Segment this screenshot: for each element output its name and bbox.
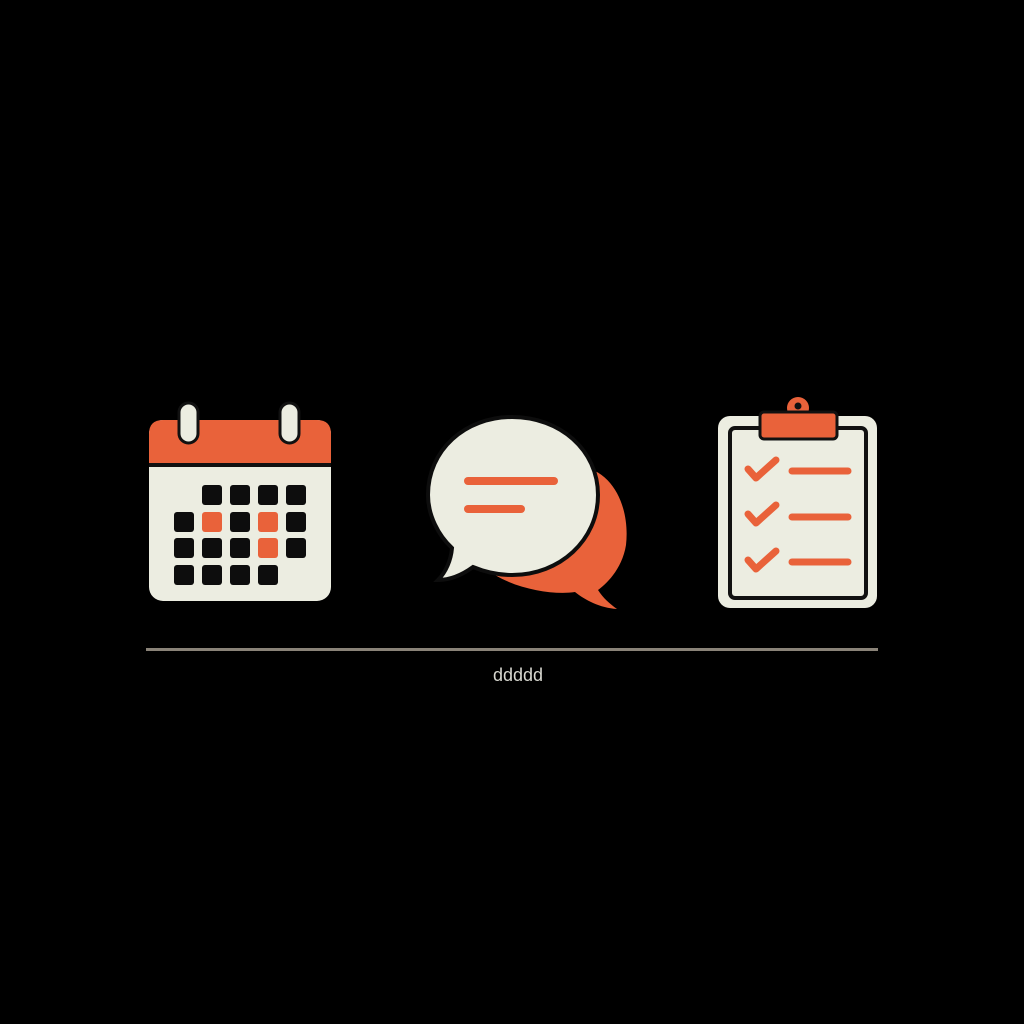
icon: speech bubbles xyxy=(428,417,627,609)
caption: ddddd xyxy=(493,665,543,685)
divider line xyxy=(146,648,878,651)
icon: calendar xyxy=(149,403,331,601)
icon: clipboard xyxy=(718,397,877,608)
